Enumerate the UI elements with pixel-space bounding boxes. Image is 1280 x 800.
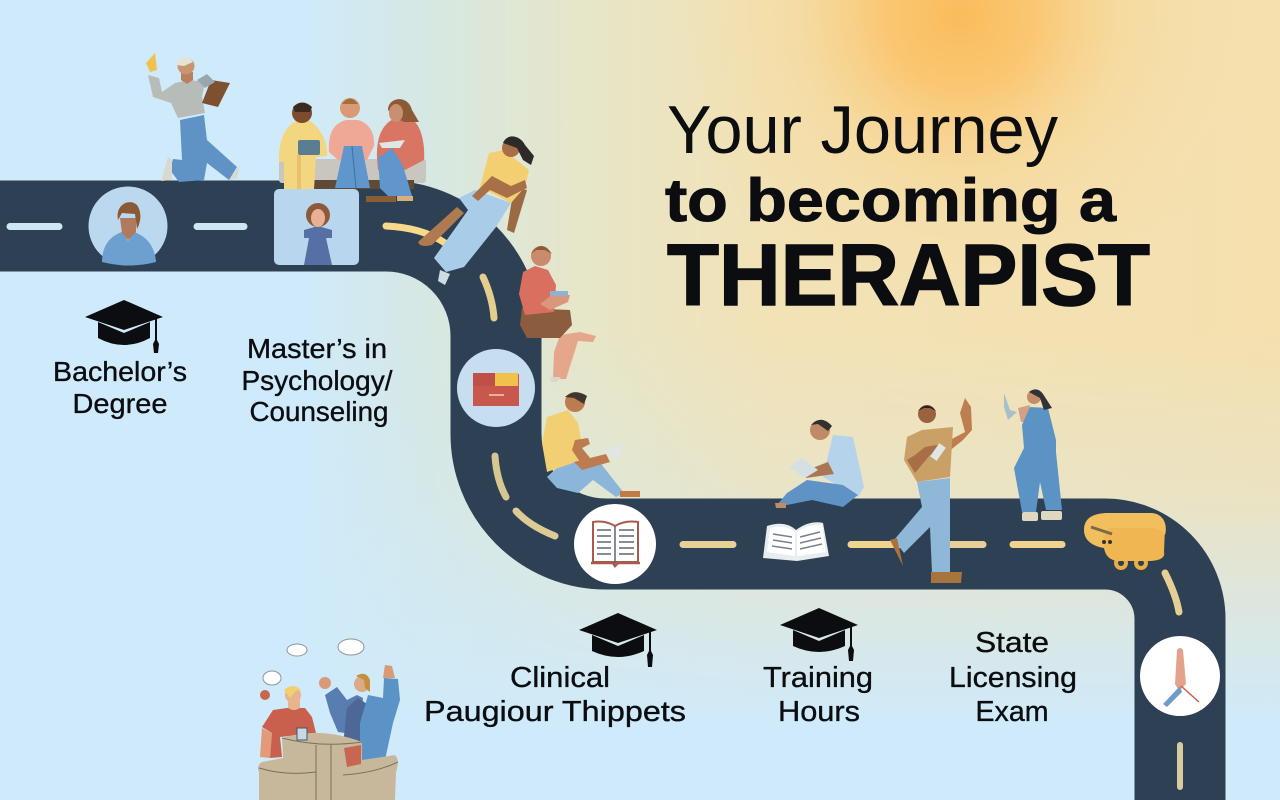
title: Your Journey xyxy=(667,92,1058,168)
group: three students on a bench xyxy=(279,98,426,202)
label: Training Hours: Training xyxy=(763,662,873,694)
title xyxy=(665,92,1150,324)
icon: graduation cap 3 xyxy=(780,608,858,661)
person: woman with plant xyxy=(1004,389,1062,521)
person: seated man with tablet xyxy=(775,420,864,508)
step badge: compass xyxy=(1140,636,1220,716)
person: kneeling student with book xyxy=(146,53,240,182)
step badge: bachelor portrait xyxy=(88,186,168,266)
label: Training Hours xyxy=(763,662,873,728)
group: two people talking at podium xyxy=(258,639,400,800)
step badge: master's portrait xyxy=(274,189,359,265)
title: to becoming a xyxy=(665,167,1117,234)
label: State Licensing Exam: Exam xyxy=(976,696,1048,728)
label: State Licensing Exam: State xyxy=(975,627,1049,659)
road dashes xyxy=(10,226,1180,787)
label: Clinical xyxy=(424,662,686,728)
icon: graduation cap 2 xyxy=(579,613,657,667)
label: Clinical: Paugiour Thippets xyxy=(424,696,686,728)
label: Bachelor's Degree: Bachelor’s xyxy=(53,356,187,387)
winding road xyxy=(0,226,1180,800)
person: walking man waving xyxy=(890,398,972,583)
label: Bachelor's Degree xyxy=(53,356,187,419)
label: Master's in Psychology/Counseling: Counseling xyxy=(250,396,388,427)
person: woman reclining on chair xyxy=(418,136,534,285)
label: Master's in Psychology/Counseling: Master’s in xyxy=(247,333,387,364)
label: Master's in Psychology/Counseling xyxy=(242,333,393,427)
label: State Licensing Exam xyxy=(949,627,1077,728)
person: man in coral shirt xyxy=(519,246,596,382)
icon: open book on road xyxy=(763,522,829,561)
label: Training Hours: Hours xyxy=(778,696,860,728)
title: THERAPIST xyxy=(667,227,1150,324)
icon: graduation cap 1 xyxy=(85,300,163,353)
label: Clinical: Clinical xyxy=(510,662,610,694)
label: Bachelor's Degree: Degree xyxy=(72,388,168,419)
step badge: open book xyxy=(574,504,656,584)
person: man in yellow sweater reading xyxy=(542,392,640,497)
label: State Licensing Exam: Licensing xyxy=(949,662,1077,694)
label: Master's in Psychology/Counseling: Psychology/ xyxy=(242,365,393,396)
step badge: red and yellow box xyxy=(457,349,535,427)
icon: golden chest xyxy=(1084,513,1166,570)
